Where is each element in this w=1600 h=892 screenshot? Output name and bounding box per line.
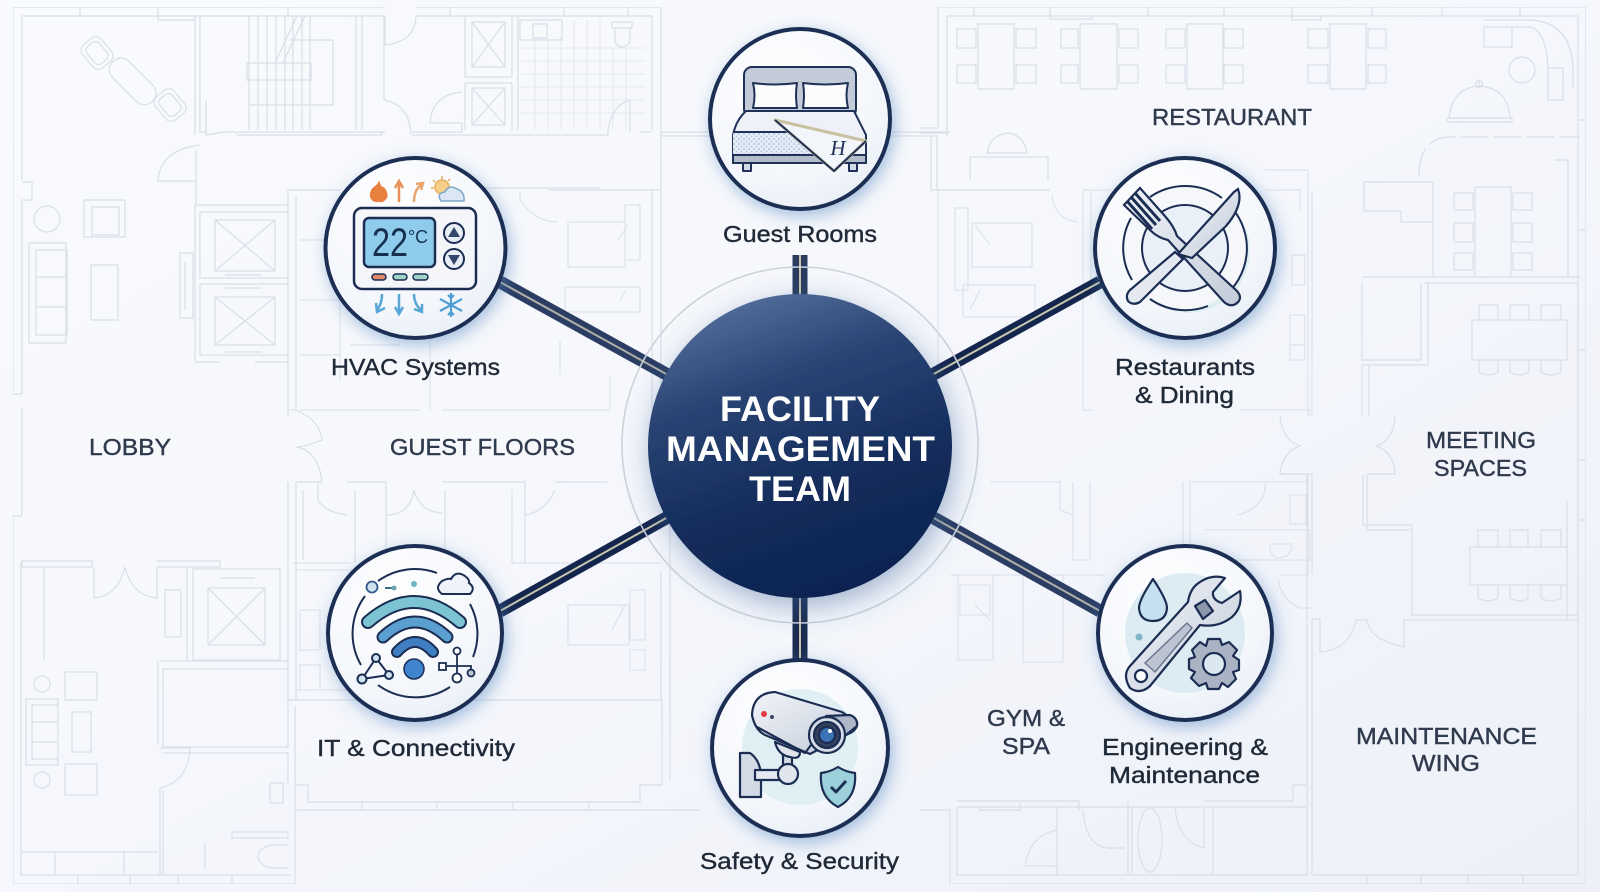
label: Restaurants — [1115, 354, 1255, 380]
node circle — [1098, 546, 1272, 720]
label: HVAC Systems — [331, 354, 500, 380]
label: IT & Connectivity — [317, 735, 516, 761]
lobby furniture — [29, 200, 193, 343]
label: Safety & Security — [700, 848, 900, 874]
icon: cool arrows and snowflake — [376, 294, 422, 314]
icon: sun and cloud — [435, 180, 449, 194]
lower right rooms — [957, 474, 1578, 884]
node: Engineering and Maintenance — [1098, 546, 1272, 788]
area label: maintenance wing: MAINTENANCE — [1356, 723, 1537, 749]
hub outer ring — [622, 267, 978, 623]
node circle — [710, 29, 890, 209]
area label: guest floors: GUEST FLOORS — [390, 434, 575, 460]
meeting room plan top right — [1280, 137, 1581, 615]
stairs and core top left — [195, 16, 608, 135]
restaurant outer walls — [920, 7, 1586, 884]
hub disc — [648, 294, 952, 598]
area label: maintenance wing — [1356, 723, 1537, 776]
hub title — [666, 390, 935, 509]
icon: thermostat: 22 — [372, 221, 408, 265]
lobby doors and hall walls — [158, 140, 661, 447]
node: Restaurants and Dining — [1095, 158, 1275, 408]
icon: thermostat: °C — [408, 227, 428, 247]
label: Guest Rooms — [723, 221, 877, 247]
area label: meeting spaces — [1426, 427, 1536, 481]
icon: water drop — [1139, 579, 1167, 621]
mid right rooms — [938, 170, 1312, 480]
hub title: FACILITY — [720, 390, 880, 429]
connector: hub to Safety and Security — [792, 592, 808, 665]
node circle — [1095, 158, 1275, 338]
icon: cloud — [438, 574, 473, 594]
label: Maintenance — [1109, 762, 1260, 788]
area label: restaurant: RESTAURANT — [1152, 104, 1312, 130]
lower middle right rooms — [951, 474, 1312, 662]
top-left elevators and bath — [430, 16, 652, 135]
area label: gym and spa — [987, 705, 1065, 759]
connector: hub to Restaurants and Dining — [932, 282, 1100, 375]
icon: network nodes — [362, 658, 389, 679]
area label: gym and spa: GYM & — [987, 705, 1065, 731]
icon: flame and warm arrows — [370, 180, 388, 202]
area label: maintenance wing: WING — [1412, 750, 1480, 776]
icon: shield — [821, 767, 855, 807]
outer walls left side — [13, 7, 661, 884]
icon: wrench, gear and drop — [1125, 573, 1245, 693]
connector: hub to Engineering and Maintenance — [932, 517, 1100, 611]
label: & Dining — [1135, 382, 1234, 408]
hub title: MANAGEMENT — [666, 430, 935, 469]
area label: meeting spaces: SPACES — [1434, 455, 1527, 481]
icon: wifi and network — [353, 569, 477, 697]
node circle — [712, 660, 888, 836]
icon: wrench — [1126, 577, 1241, 691]
icon: bed: H — [829, 136, 847, 160]
label — [1115, 354, 1255, 408]
icon: thermostat — [354, 176, 476, 317]
hub title: TEAM — [749, 470, 851, 509]
connector: hub to HVAC Systems — [500, 282, 668, 375]
label: Engineering & — [1102, 734, 1268, 760]
connector: hub to Guest Rooms — [792, 255, 808, 300]
connector: hub to IT and Connectivity — [500, 517, 668, 611]
upper guest rooms — [300, 190, 640, 410]
icon: plate and cutlery — [1123, 186, 1250, 313]
area label: meeting spaces: MEETING — [1426, 427, 1536, 453]
icon: gear — [1189, 639, 1239, 689]
bar counter and cloches — [970, 20, 1573, 180]
node circle — [326, 158, 506, 338]
node: HVAC Systems — [326, 158, 506, 380]
central hub — [622, 267, 978, 623]
node: Guest Rooms — [710, 29, 890, 247]
restaurant tables — [957, 24, 1386, 89]
label — [1102, 734, 1268, 788]
node circle — [328, 546, 502, 720]
central hall and lower guest rooms — [288, 132, 950, 884]
lower-left rooms — [22, 561, 288, 884]
node: Safety and Security — [700, 660, 900, 874]
area label: lobby: LOBBY — [89, 434, 171, 460]
icon: bed — [733, 67, 866, 171]
icon: security camera and shield — [740, 689, 858, 807]
area label: gym and spa: SPA — [1002, 733, 1051, 759]
node: IT and Connectivity — [317, 546, 516, 761]
lounge chairs top left — [78, 34, 189, 124]
